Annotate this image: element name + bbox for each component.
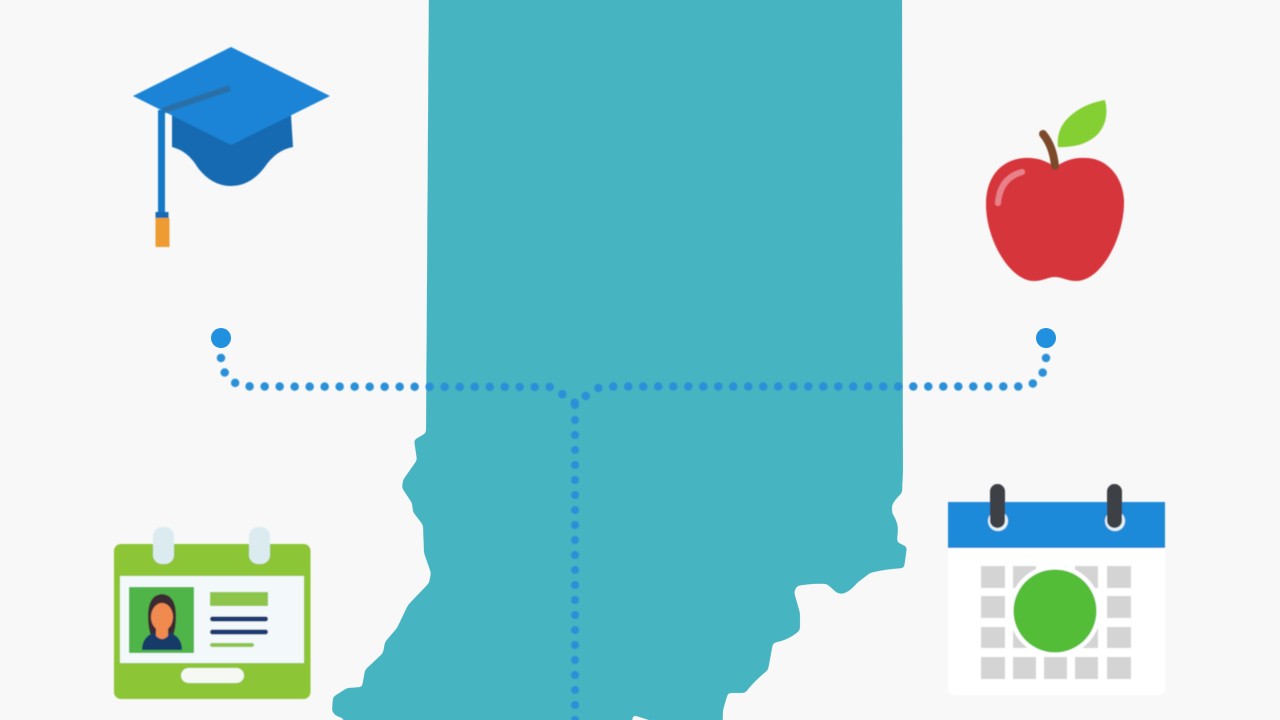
calendar date grid [981,566,1131,679]
badge card [114,544,310,699]
map: Indiana state silhouette [332,0,907,720]
vertical connector trunk [571,405,579,720]
icon: ID badge [114,527,310,699]
dotted connector lines [221,358,1046,720]
icon: red apple [986,100,1124,281]
badge clip: right [249,527,270,564]
badge information panel [120,576,304,663]
left connector branch [221,358,575,403]
connector end dot: left [211,328,231,348]
icon: calendar [948,484,1165,695]
badge slot [181,668,244,683]
calendar highlighted date [1009,565,1101,657]
calendar binding rings [988,484,1125,531]
calendar page [948,530,1165,695]
connector end dot: right [1036,328,1056,348]
badge name field [210,592,268,606]
right connector branch [575,358,1046,403]
calendar header [948,502,1165,548]
badge portrait [129,587,194,653]
badge text lines [210,616,268,647]
badge clip: left [153,527,174,564]
icon: graduation cap [133,47,330,247]
